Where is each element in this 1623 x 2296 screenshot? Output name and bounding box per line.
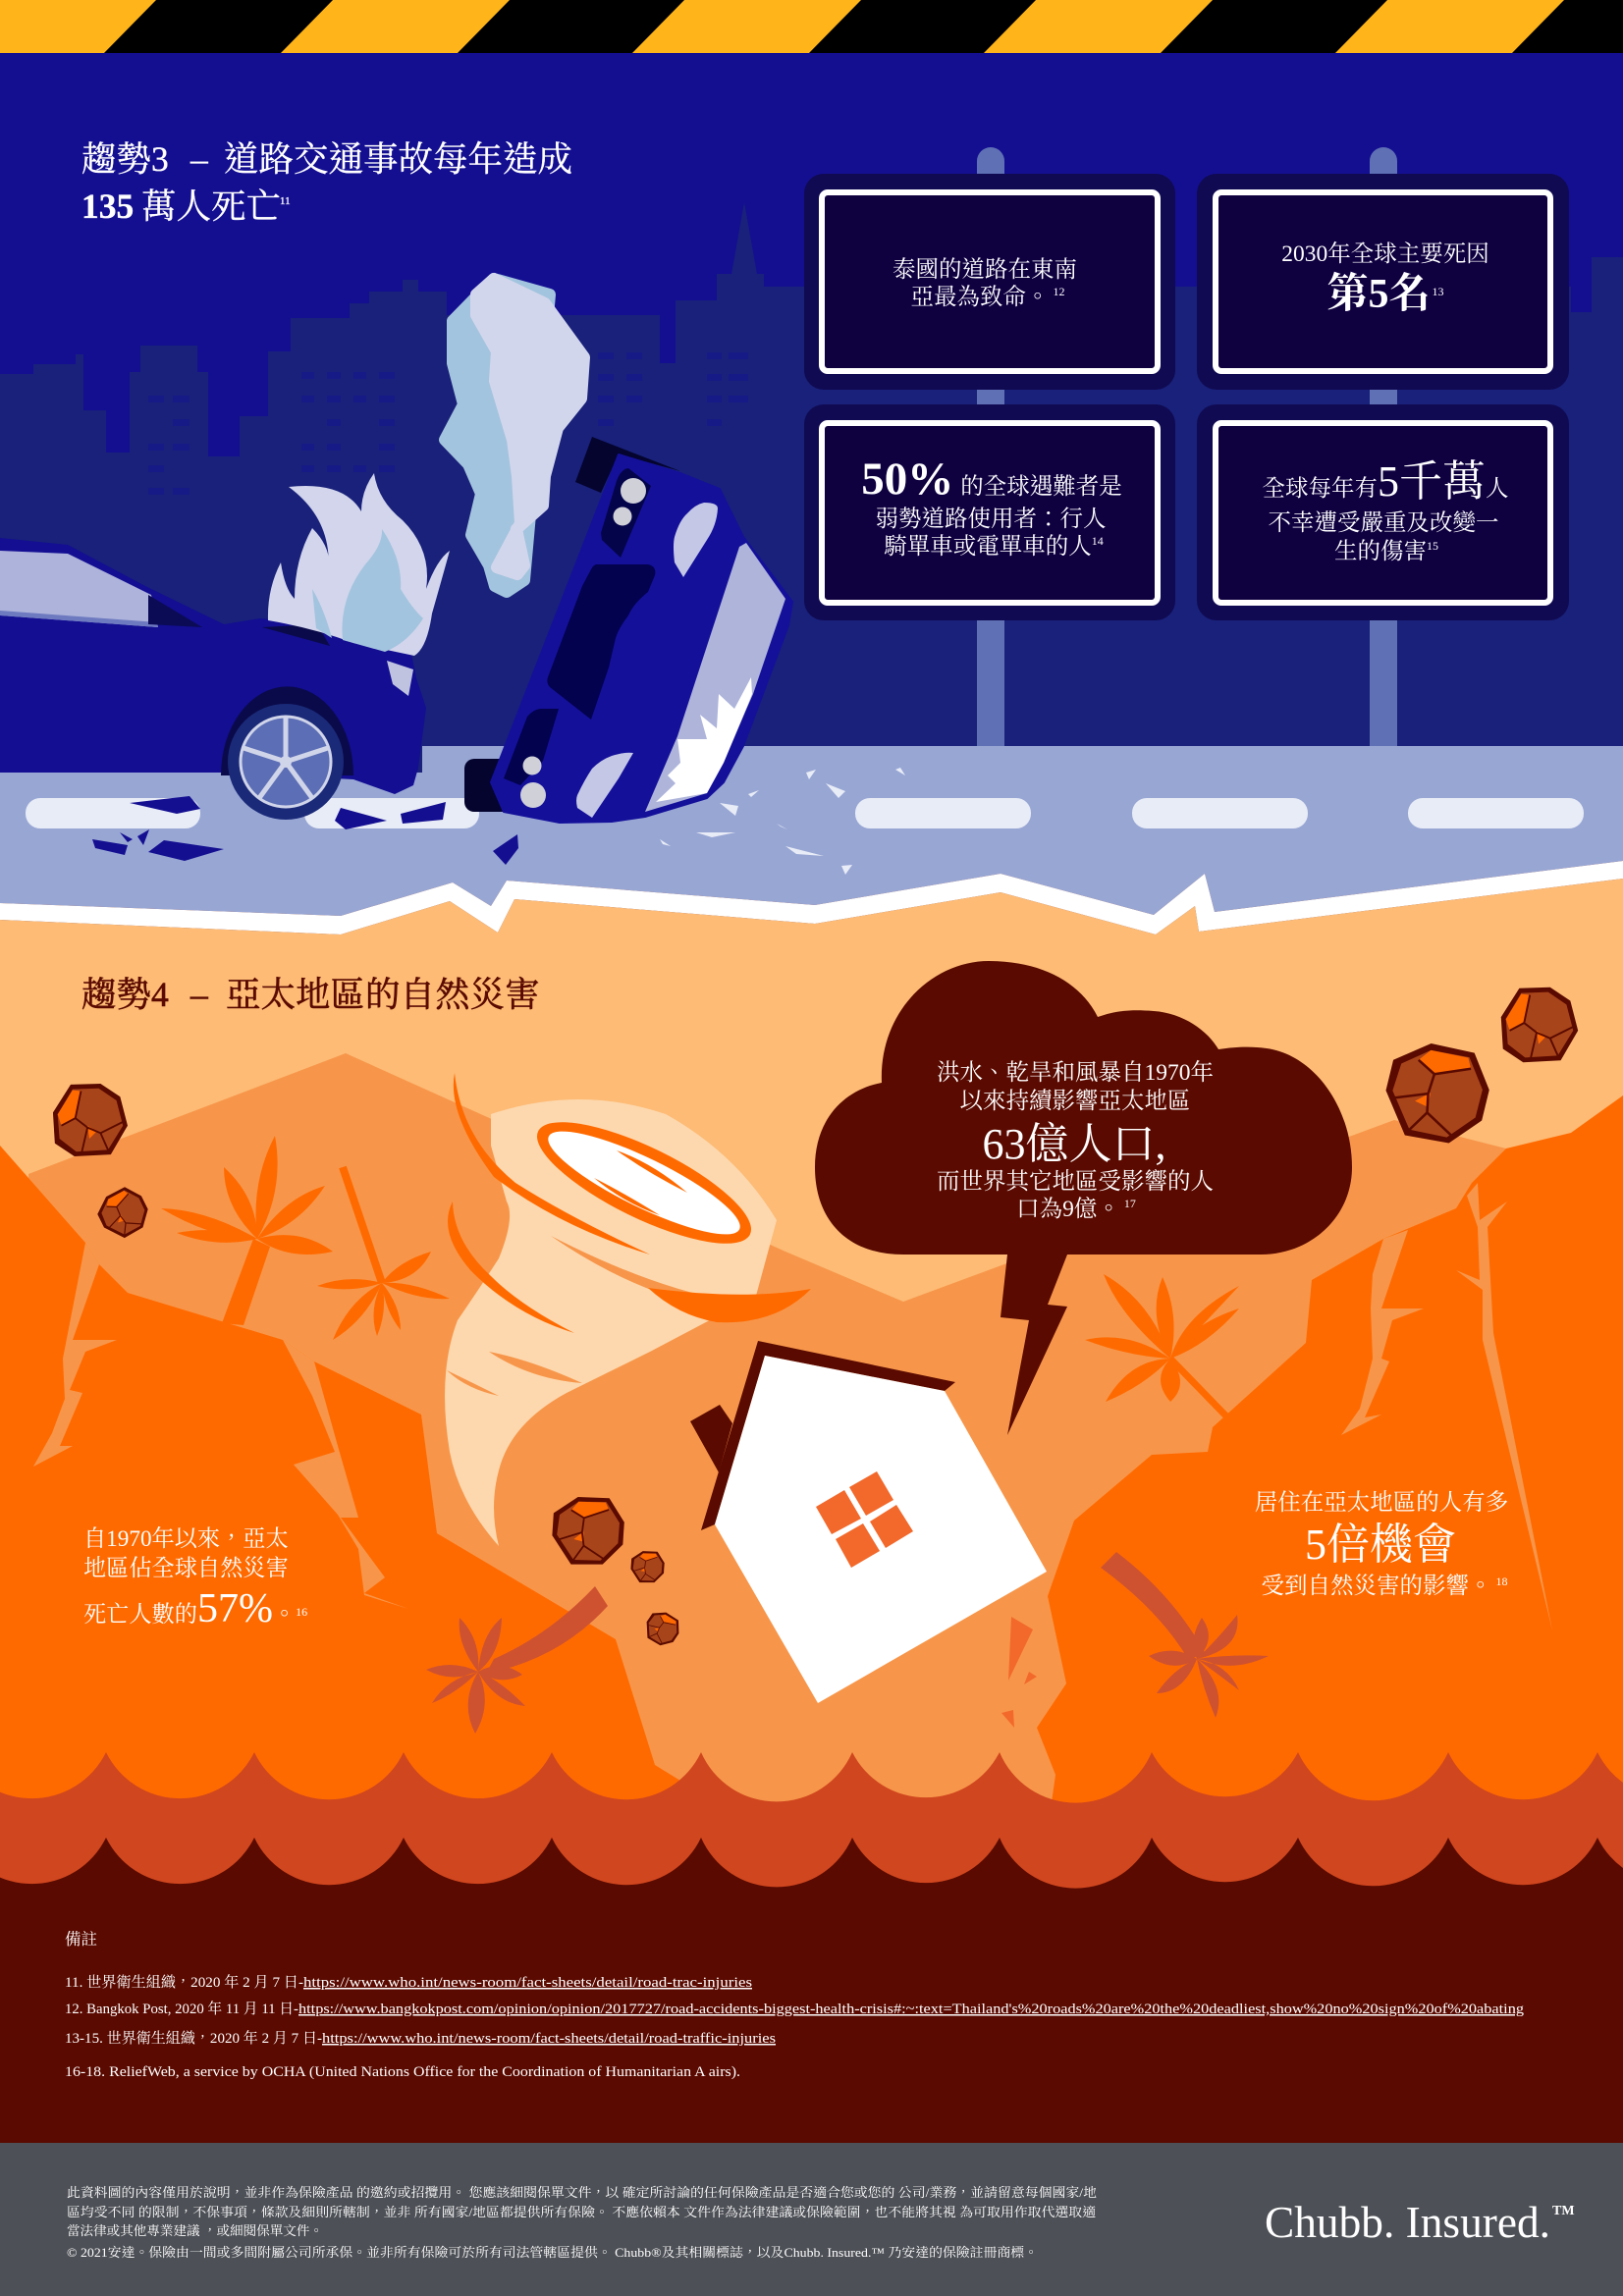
headlight housing <box>601 468 651 558</box>
house roof <box>701 1341 955 1530</box>
falling house <box>690 1341 1047 1703</box>
sign: 50 percent vulnerable road users: 弱勢道路使用者：行人 <box>876 506 1106 532</box>
sign: 50 million injured: 15 <box>1427 539 1438 553</box>
white crack edge <box>0 861 1623 934</box>
sign: Thailand deadliest roads: 12 <box>1053 285 1064 298</box>
lower bumper <box>464 759 514 812</box>
callout text: 57 percent of deaths <box>83 1526 307 1631</box>
disclaimer text: 此資料圖的內容僅用於說明，並非作為保險產品 的邀約或招攬用。 您應該細閱保單文件，以 確定所討論的任何保險產品是否適合您或您的 公司/業務，並請留意每個國家/地 <box>67 2185 1097 2200</box>
upper bumper <box>575 437 680 493</box>
heading: trend 3: 11 <box>280 195 291 207</box>
house chimney <box>690 1405 732 1472</box>
sign: fifth leading cause of death 2030 <box>1197 174 1569 390</box>
callout text: 6.3 billion people: 以來持續影響亞太地區 <box>960 1088 1190 1114</box>
left cliff <box>0 1146 717 1816</box>
glass debris shards <box>660 768 905 875</box>
heading: trend 3: 135 <box>81 187 134 226</box>
disclaimer text: 當法律或其他專業建議 ，或細閱保單文件。 <box>67 2223 323 2238</box>
tornado mouth <box>522 1099 766 1266</box>
car body <box>0 538 426 794</box>
car mirror <box>148 595 202 627</box>
shattered glass <box>656 677 752 802</box>
notes heading: 備註 <box>65 1930 97 1949</box>
sign: fifth leading cause of death 2030: 13 <box>1433 285 1444 298</box>
note 16-18: 16-18. ReliefWeb, a service by OCHA (United Nations Office for the Coordination of Humanitarian A airs). <box>65 2064 740 2080</box>
car hood gap <box>262 624 330 646</box>
heading: trend 4: – <box>189 975 208 1014</box>
sign posts <box>977 147 1397 746</box>
car debris shards <box>92 796 518 865</box>
car side window <box>0 551 158 627</box>
cloud lightning tail <box>1001 1255 1067 1435</box>
wheel ovals <box>674 503 718 577</box>
Chubb logo: TM <box>1552 2204 1575 2218</box>
windscreen <box>645 543 785 812</box>
note 12: 12. Bangkok Post, 2020 年 11 月 11 日- <box>65 2000 298 2017</box>
hazard stripe banner <box>0 0 1623 53</box>
callout text: five times more likely: 18 <box>1496 1575 1508 1588</box>
callout text: 6.3 billion people <box>937 1059 1214 1222</box>
flood wave: red layer <box>0 1752 1623 1914</box>
sign: 50 million injured <box>1197 404 1569 620</box>
sign: 50 million injured: 不幸遭受嚴重及改變一 <box>1269 509 1498 536</box>
sign: Thailand deadliest roads: 亞最為致命。 <box>911 285 1049 310</box>
palm silhouette: uprooted tree <box>317 1167 450 1340</box>
Chubb logo: Chubb. Insured. <box>1265 2197 1550 2247</box>
callout text: 6.3 billion people: 63億人口, <box>982 1120 1166 1168</box>
callout text: 57 percent of deaths: 16 <box>296 1605 307 1619</box>
sign: fifth leading cause of death 2030: 2030年全球主要死因 <box>1281 240 1489 267</box>
road lane markings <box>26 798 1584 828</box>
disclaimer text: © 2021安達。保險由一間或多間附屬公司所承保。並非所有保險可於所有司法管轄區提供。 Chubb®及其相關標誌，以及Chubb. Insured.™ 乃安達的保險註冊商標。 <box>67 2245 1038 2260</box>
car headlight <box>387 661 413 696</box>
heading: trend 3: – <box>189 139 208 179</box>
callout text: five times more likely: 受到自然災害的影響。 <box>1261 1574 1492 1599</box>
right cliff <box>1037 1095 1623 1816</box>
note 11: 11. 世界衛生組織，2020 年 2 月 7 日- <box>65 1973 303 1991</box>
sign: fifth leading cause of death 2030: 第5名 <box>1326 272 1431 317</box>
heading: trend 4: 亞太地區的自然災害 <box>226 975 540 1014</box>
flood wave: dark layer <box>0 1838 1623 2143</box>
callout text: five times more likely: 居住在亞太地區的人有多 <box>1255 1489 1508 1516</box>
heading: trend 3: 萬人死亡 <box>141 187 281 226</box>
disclaimer text: 區均受不同 的限制，不保事項，條款及細則所轄制，並非 所有國家/地區都提供所有保險。 不應依賴本 文件作為法律建議或保險範圍，也不能將其視 為可取用作取代選取適 <box>67 2205 1096 2219</box>
note 11: https://www.who.int/news-room/fact-sheets/detail/road-trac-injuries <box>303 1975 752 1991</box>
sign: 50 percent vulnerable road users: 50% 的全球遇難者是 <box>861 454 1122 505</box>
flames <box>268 473 450 656</box>
heading: trend 3: 道路交通事故每年造成 <box>224 139 572 179</box>
callout text: 6.3 billion people: 洪水、乾旱和風暴自1970年 <box>937 1059 1214 1086</box>
car wheel <box>221 686 353 820</box>
heading: trend 4: 趨勢4 <box>81 975 169 1014</box>
note 12: https://www.bangkokpost.com/opinion/opinion/2017727/road-accidents-biggest-health-crisis#:~:text=Thailand's%20roads%20are%20the%20deadliest,show%20no%20sign%20of%20abating <box>298 2002 1525 2017</box>
car body <box>491 454 792 823</box>
road <box>0 746 1623 916</box>
mid-tone mountains <box>28 1053 1506 1816</box>
falling boulders <box>53 988 1578 1645</box>
left car, front crushed <box>0 538 426 820</box>
palm silhouette: right of lightning <box>1085 1274 1239 1424</box>
callout text: 6.3 billion people: 而世界其它地區受影響的人 <box>937 1168 1214 1195</box>
notes section <box>65 1930 1525 2080</box>
sign: 50 percent vulnerable road users: 14 <box>1092 534 1104 548</box>
sign: 50 million injured: 全球每年有5千萬人 <box>1263 457 1508 506</box>
disclaimer text <box>67 2185 1097 2260</box>
note 12 <box>65 2000 1525 2017</box>
night sky <box>0 53 1623 789</box>
speech cloud <box>815 961 1352 1435</box>
callout text: five times more likely <box>1255 1489 1508 1599</box>
overturned right car <box>464 437 792 823</box>
small shards beside house <box>1001 1617 1037 1728</box>
peach sky <box>0 879 1623 1865</box>
house body <box>715 1356 1047 1703</box>
note 13-15: https://www.who.int/news-room/fact-sheets/detail/road-traffic-injuries <box>322 2031 776 2047</box>
tornado <box>445 1073 811 1546</box>
callout text: 6.3 billion people: 口為9億。 <box>1016 1197 1120 1222</box>
callout text: 57 percent of deaths: 自1970年以來，亞太 <box>83 1526 289 1552</box>
flying palm lower left <box>426 1586 608 1734</box>
footer band <box>0 2143 1623 2296</box>
sign: 50 percent vulnerable road users <box>804 404 1175 620</box>
sign: 50 million injured: 生的傷害 <box>1334 539 1427 564</box>
heading: trend 3: 趨勢3 <box>81 139 169 179</box>
callout text: 57 percent of deaths: 死亡人數的57%。 <box>83 1586 296 1631</box>
sign: Thailand deadliest roads <box>804 174 1175 390</box>
sign: 50 percent vulnerable road users: 騎單車或電單車的人 <box>884 534 1092 560</box>
callout text: five times more likely: 5倍機會 <box>1305 1521 1456 1569</box>
callout text: 6.3 billion people: 17 <box>1124 1197 1136 1210</box>
palm silhouette: banana tree upper left <box>161 1136 333 1325</box>
note 13-15 <box>65 2029 776 2047</box>
flying palm lower right <box>1101 1552 1269 1718</box>
smoke plume <box>445 279 584 592</box>
note 11 <box>65 1973 752 1991</box>
note 13-15: 13-15. 世界衛生組織，2020 年 2 月 7 日- <box>65 2029 322 2047</box>
callout text: 57 percent of deaths: 地區佔全球自然災害 <box>83 1556 289 1581</box>
side window <box>547 564 655 720</box>
tornado swirl bands <box>454 1073 650 1255</box>
heading: trend 3 <box>81 139 572 226</box>
city skyline <box>0 202 1623 789</box>
house window <box>816 1471 913 1568</box>
sign: Thailand deadliest roads: 泰國的道路在東南 <box>893 256 1077 283</box>
tornado body <box>445 1099 777 1546</box>
